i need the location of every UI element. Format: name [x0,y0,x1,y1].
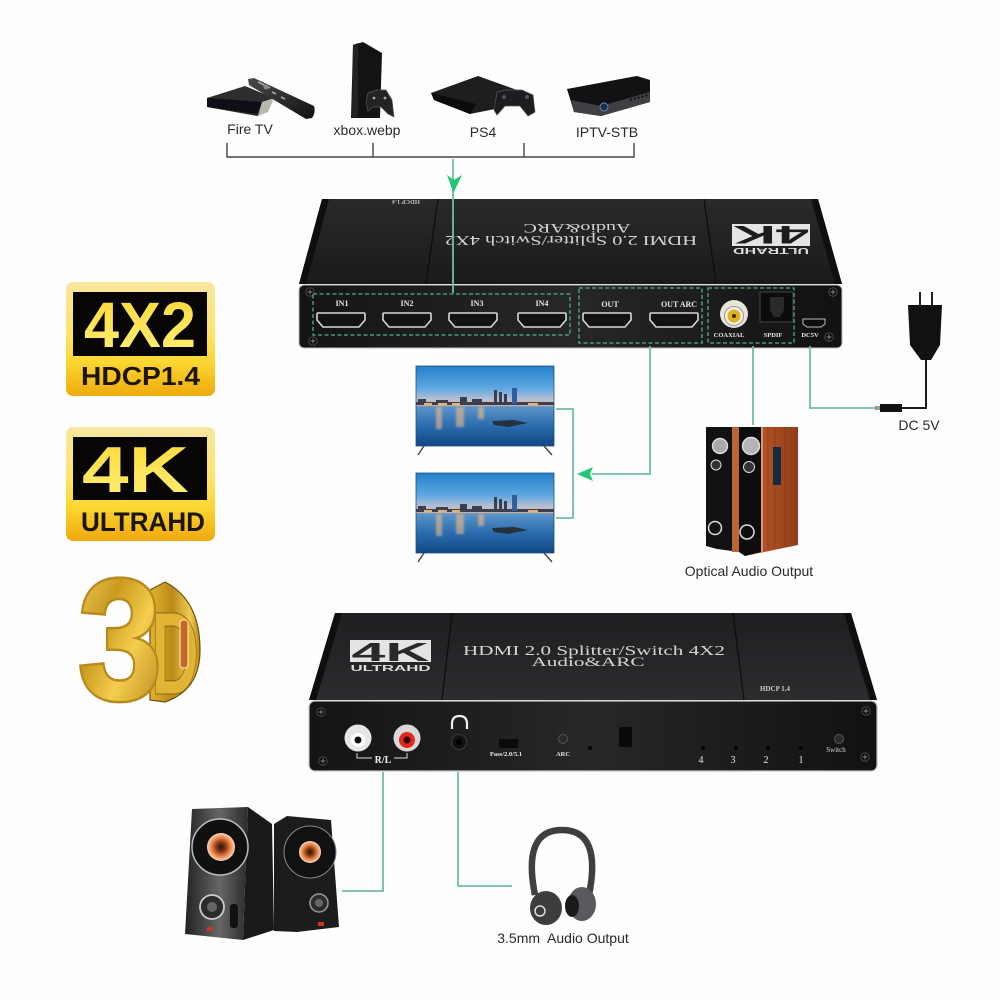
icon: headphones symbol [452,716,467,729]
switch button: Switch [826,746,846,754]
port labels: IN4 [536,299,548,308]
input LEDs: 4 [698,755,704,766]
HDCP label: HDCP 1.4 [760,685,790,693]
panel: bottom device, output side [309,613,877,771]
dashed box: inputs [313,294,570,335]
wire: TV link [556,409,573,518]
input LEDs: 1 [798,755,804,766]
badge: 4X2 HDCP1.4: 4X2 [84,289,196,361]
coaxial jack [720,300,748,328]
dashed box: outputs [579,288,702,343]
icon: Fire TV box and remote [207,78,315,119]
micro USB port [803,319,825,327]
badge: 4K ULTRAHD: ULTRAHD [81,507,205,537]
4K Ultra HD logo: 4K [352,637,430,667]
HDMI ports [317,313,698,327]
SPDIF output [619,727,632,747]
badge: 3D gold: 3 [78,544,162,736]
port labels [336,299,819,339]
dashed box: audio [708,288,794,343]
badge: 4X2 HDCP1.4: HDCP1.4 [81,361,201,391]
device front face [299,285,842,348]
icon: headphones [530,830,596,925]
RCA red jack [394,724,420,752]
product title [463,643,725,669]
SPDIF jack [760,292,793,322]
badge: 4K ULTRAHD [66,427,215,541]
wire: jack to headphones [458,772,512,886]
mirrored 4K Ultra HD logo: 4K [733,220,809,248]
label: optical audio output: Optical Audio Output [685,563,813,579]
icon: DC power adapter [875,292,942,412]
wire: DC power [810,346,875,408]
ARC button: ARC [556,751,570,758]
screws [317,707,870,765]
mirrored 4K Ultra HD logo [732,220,810,255]
RCA white jack [344,724,372,752]
source devices row [207,42,650,140]
4K Ultra HD logo: ULTRAHD [350,664,431,673]
mirrored product title [445,221,697,248]
port labels: OUT ARC [661,300,697,309]
device top face [309,613,877,700]
port labels: IN3 [471,299,483,308]
icon: PS4 console and controller [431,76,535,116]
TV screen 1 [416,366,554,455]
headphone jack [452,734,466,750]
input LEDs: 2 [764,755,768,766]
badge: 3D gold: D [151,588,199,720]
mirrored product title: HDMI 2.0 Splitter/Switch 4X2 [445,233,697,248]
badge: 4X2 HDCP1.4 [66,282,215,396]
product title: HDMI 2.0 Splitter/Switch 4X2 [463,643,725,658]
product title: Audio&ARC [532,654,644,669]
wire: outputs to TVs [577,346,650,481]
input LEDs [698,746,804,766]
R/L label: R/L [375,755,392,766]
icon: tower speakers [706,427,798,556]
mirrored HDCP label: HDCP 1.4 [391,198,420,205]
wire: audio to speakers [752,346,754,425]
label: DC 5V: DC 5V [898,417,940,433]
pass switch [490,739,522,758]
label: xbox.webp: xbox.webp [334,122,401,138]
switch button [826,734,846,754]
panel: top device, input side [299,198,842,348]
mirrored product title: Audio&ARC [524,221,630,236]
port labels: IN2 [401,299,413,308]
label: IPTV-STB: IPTV-STB [576,124,638,140]
port labels: COAXIAL [714,332,745,339]
port labels: DC5V [801,332,819,339]
port labels: IN1 [336,299,348,308]
badge: 4K ULTRAHD: 4K [82,433,189,506]
device front face [309,701,877,771]
arrow: sources to HDMI inputs [447,159,462,293]
label: Fire TV: Fire TV [227,121,273,137]
R/L label [357,753,407,766]
ARC LED [588,746,592,750]
bracket joining sources [227,143,634,157]
wire: RCA to speakers [342,772,383,891]
icon: IPTV set-top box [567,76,650,116]
label: 3.5mm audio output: 3.5mm Audio Output [497,930,629,946]
label: PS4: PS4 [470,124,496,140]
screws [306,288,837,345]
icon: Xbox console and controller [351,42,394,118]
TV screen 2 [416,473,554,562]
device top face [299,199,842,284]
4K Ultra HD logo [350,637,431,673]
icon: desktop speakers [185,807,339,940]
mirrored 4K Ultra HD logo: ULTRAHD [733,246,809,255]
port labels: SPDIF [764,332,782,339]
pass switch: Pass/2.0/5.1 [490,751,522,758]
input LEDs: 3 [730,755,736,766]
ARC button [556,734,570,758]
port labels: OUT [601,300,619,309]
